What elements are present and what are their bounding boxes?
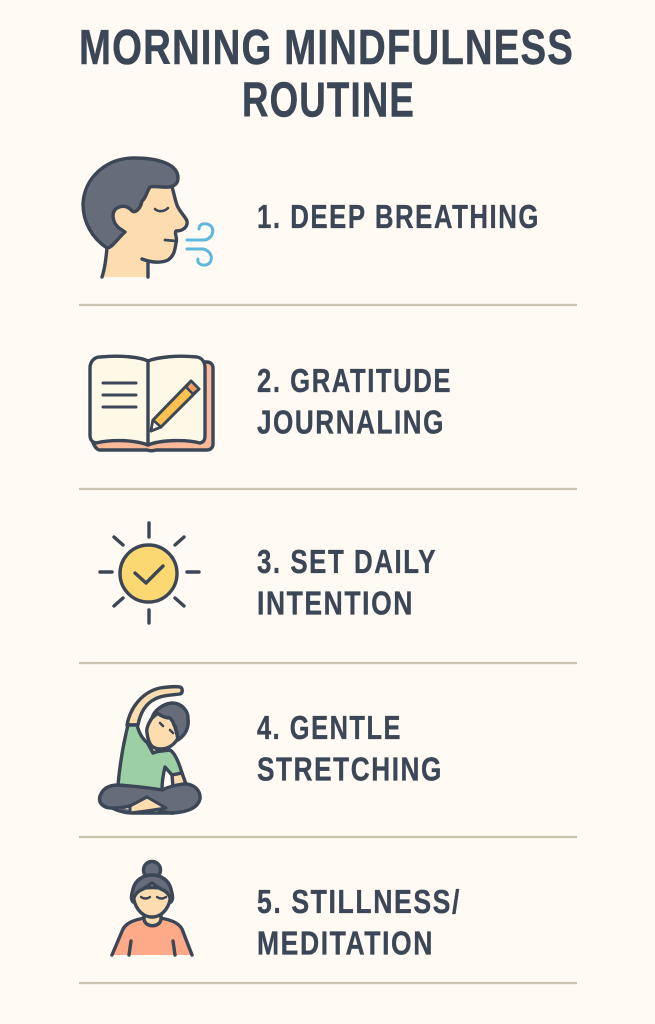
title — [79, 20, 574, 128]
step 3 label — [257, 544, 437, 622]
icon: breathing head — [83, 158, 213, 277]
step 4 label — [257, 710, 443, 788]
icon: journal with pencil — [90, 356, 213, 451]
title: ROUTINE — [242, 72, 415, 128]
step 1 label: 1. DEEP BREATHING — [257, 199, 540, 236]
step 2 label: 2. GRATITUDE — [257, 363, 452, 400]
step 4 label: STRETCHING — [257, 752, 443, 788]
icon: meditating person — [112, 862, 192, 955]
icon: sun with check mark — [100, 523, 199, 623]
step 3 label: 3. SET DAILY — [257, 544, 437, 581]
icon: stretching person — [100, 687, 200, 813]
step 2 label: JOURNALING — [257, 404, 445, 442]
step 5 label: MEDITATION — [257, 926, 434, 962]
step 3 label: INTENTION — [257, 586, 414, 622]
step 2 label — [257, 363, 452, 442]
step 4 label: 4. GENTLE — [257, 710, 402, 747]
step 5 label — [257, 884, 461, 962]
step 5 label: 5. STILLNESS/ — [257, 884, 461, 921]
